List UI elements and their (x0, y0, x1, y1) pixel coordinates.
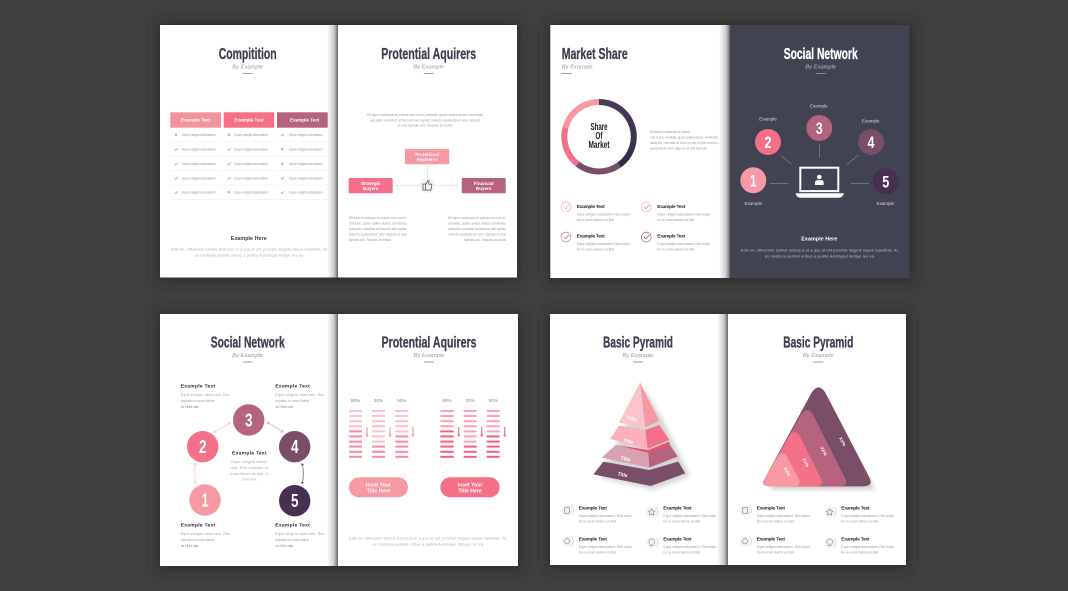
text block top left: Example Text (181, 384, 216, 390)
comparison table: Eque veligris adecastem (234, 191, 268, 195)
side paragraph (650, 130, 718, 150)
chart: 3D pyramid: Title (620, 456, 631, 464)
comparison table: Eque veligris adecastem (289, 191, 323, 195)
percent labels: 50% (489, 398, 498, 403)
panel: Basic Pyramid layered page (728, 314, 906, 565)
text block bottom left: as. Nihilor aatis (181, 544, 199, 548)
node 3: Example (810, 103, 828, 108)
feature item 4: bo re erum ilaime es lilat (663, 550, 700, 554)
left paragraph: omniate, quam autius dolore omnimets (349, 222, 407, 226)
pill button 2 (440, 477, 500, 497)
comparison table: Eque veligris adecastem (182, 133, 216, 137)
node 1 (740, 167, 766, 206)
donut chart: Market (588, 140, 610, 151)
right paragraph: Rit liqus modiendo te volesti eos nus le, (448, 216, 506, 220)
left paragraph: bjendis ant. Sequas as estiat (349, 238, 391, 242)
comparison table: Example Text (290, 118, 320, 123)
chart: 3D pyramid (593, 382, 690, 490)
subtitle (623, 353, 654, 362)
example here text block (171, 236, 327, 258)
right paragraph (448, 216, 506, 242)
feature item 2: Eque veligris adecastem. Res explo (841, 514, 894, 518)
example here text block: Example Here (801, 236, 837, 242)
title: Protential Aquirers: Protential Aquirers (381, 46, 476, 63)
feature item 1: Eque veligris adecastem. Res explo (579, 514, 632, 518)
title: Protential Aquirers: Protential Aquirers (382, 334, 477, 352)
node 2 (187, 431, 218, 462)
comparison table: Eque veligris adecastem (234, 133, 268, 137)
checklist item 2: bo re erum aserre es lilat (657, 218, 694, 222)
diagram: buyers: Protetiocal (415, 152, 439, 157)
feature item 3: Example Text (579, 536, 607, 542)
cycle arrows (194, 422, 304, 484)
subtitle: By Example (623, 353, 654, 359)
feature item 2: Eque veligris adecastem. Res explo (663, 514, 716, 518)
text block top right (275, 384, 325, 409)
comparison table: Eque veligris adecastem (234, 162, 268, 166)
right paragraph: adcipitis volestiat at faccum ate luptas (448, 227, 506, 231)
diagram: buyers (349, 149, 506, 194)
chart: layered pyramid (763, 387, 875, 490)
feature item 3: Eque veligris adecastem. Res explo (757, 545, 810, 549)
diagram: buyers: Aquirerss (416, 157, 438, 162)
footer paragraph: Edis mi, officiorem santos dolessus ut a que et unt provitas magnis seque repeditas. At (349, 536, 506, 540)
comparison table (170, 112, 328, 199)
text block center: tem. Res explabo re (230, 466, 268, 470)
comparison table: Eque veligris adecastem (289, 176, 323, 180)
feature item 4: Eque veligris adecastem. Res explo (663, 545, 716, 549)
feature item 1: Eque veligris adecastem. Res explo (757, 514, 810, 518)
subtitle: By Example (232, 353, 264, 359)
footer paragraph: es modipsa peditat uribus a pedita Aolistaqui deliqui res ea (373, 542, 483, 546)
comparison table: Eque veligris adecastem (182, 162, 216, 166)
feature item 3: Eque veligris adecastem. Res explo (579, 545, 632, 549)
donut chart: Of (596, 131, 603, 142)
text block bottom left: Example Text (181, 523, 216, 529)
subtitle (805, 65, 837, 74)
comparison table: Eque veligris adecastem (289, 148, 323, 152)
checklist item 4: Example Text (657, 233, 686, 239)
feature item 2 (824, 506, 894, 523)
percent labels (351, 398, 498, 403)
checklist item 3 (561, 232, 630, 252)
chart: 3D pyramid: Title (617, 471, 628, 479)
intro paragraph: ut utat bjendis ant. Sequas as estiat (398, 124, 452, 128)
feature item 3: bo re erum ilaime es lilat (757, 550, 794, 554)
node 2: Example (759, 116, 777, 121)
node 3 (806, 103, 832, 141)
pill button 1: Title Here (367, 488, 390, 494)
feature item 3: Example Text (757, 536, 785, 542)
comparison table: Example Text (234, 118, 264, 123)
feature item 1: Example Text (579, 506, 607, 512)
feature item 4: Example Text (841, 536, 870, 542)
donut chart: Share (590, 122, 608, 133)
comparison table: Eque veligris adecastem (289, 133, 323, 137)
checklist item 1: Eque veligris adecastem Res explo (577, 212, 630, 216)
text block center: Eque veligris valsce (231, 460, 267, 464)
icon: thumbs up (419, 178, 435, 194)
feature item 4 (824, 536, 894, 554)
left paragraph (349, 216, 407, 242)
diagram: buyers: Strategic (361, 181, 381, 186)
example here text block: Edis mi, officiorem santos dolessus ut a que et unt provitas magnis seque repeditas. At (741, 248, 898, 252)
icon: laptop (796, 168, 844, 198)
chart: layered pyramid: XX% (819, 446, 828, 457)
percent labels: 80% (442, 398, 452, 403)
comparison table: Eque veligris adecastem (182, 176, 216, 180)
node 5 (873, 168, 899, 206)
intro paragraph: adcipitis volestiat at faccum ate luptas velecto quatestrum atur aliquat (370, 118, 480, 122)
feature item 1: bo re erum ilaime es lilat (757, 519, 794, 523)
subtitle (232, 353, 264, 362)
example here text block: es modipsa peditat uribus a pedita Aolistaqui deliqui res ea (195, 254, 303, 258)
text block top right: explabo re erum ilaime (275, 399, 309, 403)
node 1: Example (745, 201, 763, 206)
checklist item 1 (561, 202, 630, 222)
node 4: 4 (291, 437, 298, 457)
example here text block: es modipsa peditat uribus a pedita Aolistaqui deliqui res ea (765, 254, 874, 258)
checklist item 4: Eque veligris adecastem Res explo (657, 242, 710, 246)
side paragraph: eos nus le, omniate, quam autius dolore omnimets (650, 136, 718, 140)
node 5: Example (877, 201, 895, 206)
percent labels: 30% (374, 398, 383, 403)
checklist item 4: bo re erum aserre es lilat (657, 248, 694, 252)
node 2 (755, 116, 781, 155)
subtitle (414, 353, 445, 362)
title: Basic Pyramid: Basic Pyramid (783, 334, 853, 352)
checklist item 1: Example Text (577, 204, 605, 210)
panel: Market Share page (550, 25, 730, 278)
chart: layered pyramid: XX% (838, 436, 847, 447)
feature item 4: Eque veligris adecastem. Res explo (841, 545, 894, 549)
node 4 (858, 118, 884, 155)
pill button 1: Inset Your (366, 482, 391, 488)
node 2: 2 (764, 133, 772, 152)
node 1: 1 (750, 171, 757, 190)
text block bottom right: as. Nihilor aatis (275, 544, 294, 548)
text block top right: as. Nihilor aatis (275, 405, 294, 409)
panel: Protential Aquirers bars page (338, 314, 518, 566)
text block center: Ovit ma. (242, 478, 257, 482)
example here text block: Example Here (231, 236, 267, 242)
bar stacks group 2 (440, 410, 506, 458)
feature item 3 (562, 536, 632, 554)
text block top right: Example Text (275, 384, 310, 390)
comparison table: Eque veligris adecastem (182, 191, 216, 195)
node 5: 5 (882, 172, 889, 191)
panel: Basic Pyramid 3D page (550, 314, 728, 565)
footer paragraph (349, 536, 506, 546)
checklist item 3: Eque veligris adecastem Res explo (577, 242, 630, 246)
feature item 3 (740, 536, 810, 554)
checklist item 2: Eque veligris adecastem Res explo (657, 212, 710, 216)
node 1 (189, 484, 221, 516)
subtitle: By Example (413, 65, 445, 71)
text block top left: Eque veligris valse tem. Res (181, 393, 230, 397)
feature item 2: Example Text (841, 506, 870, 512)
node 4: 4 (868, 133, 875, 152)
side paragraph: Rit liqus modiendo te volest (650, 130, 690, 134)
diagram: buyers: Buyers (363, 186, 379, 191)
checklist item 4 (641, 232, 710, 252)
panel: dark Social Network page (730, 25, 910, 278)
checklist item 3: Example Text (577, 233, 605, 239)
side paragraph: adcipitis volestiat at faccum ate luptas velecto (650, 141, 718, 145)
subtitle: By Example (805, 65, 837, 71)
chart: layered pyramid: XX% (783, 466, 792, 477)
diagram: buyers: Financial (474, 181, 494, 186)
panel: Compitition spread (160, 25, 338, 278)
comparison table: Eque veligris adecastem (289, 162, 323, 166)
feature item 4: Example Text (663, 536, 692, 542)
pill button 1 (349, 477, 408, 497)
text block bottom right (275, 523, 325, 548)
right paragraph: bjendis ant. Sequas as estiat (464, 238, 506, 242)
comparison table: Eque veligris adecastem (234, 176, 268, 180)
text block bottom left: Eque veligris valse tem. Res (181, 532, 230, 536)
text block bottom right: Eque veligris valse tem. Res (275, 532, 325, 536)
example here text block: Edis mi, officiorem santos dolessus ut a que et unt provitas magnis seque repeditas. At (171, 248, 327, 252)
subtitle (803, 353, 835, 362)
subtitle (562, 65, 593, 74)
title: Compitition: Compitition (219, 46, 277, 63)
percent labels: 80% (351, 398, 360, 403)
node 5 (279, 485, 310, 516)
node 3: 3 (245, 410, 252, 430)
feature item 2 (646, 506, 716, 523)
feature item 1: Example Text (757, 506, 785, 512)
title: Market Share: Market Share (562, 46, 628, 63)
pill button 2: Inset Your (458, 482, 482, 488)
feature item 1 (562, 505, 632, 523)
panel: Protential Aquirers diagram spread page (338, 25, 517, 278)
title: Social Network: Social Network (784, 46, 858, 63)
subtitle: By Example (803, 353, 835, 359)
percent labels: 50% (397, 398, 406, 403)
left paragraph: velecto quatestrum atur aliquat ut utat (349, 232, 407, 236)
left paragraph: adcipitis volestiat at faccum ate luptas (349, 227, 407, 231)
feature item 2: bo re erum ilaime es lilat (841, 519, 878, 523)
bar stacks group 1 (349, 410, 415, 458)
intro paragraph (367, 113, 483, 128)
node 3 (233, 404, 264, 436)
text block bottom right: Example Text (275, 523, 310, 529)
feature item 4: bo re erum ilaime es lilat (841, 550, 878, 554)
pill button 2: Title Here (458, 488, 482, 494)
node 2: 2 (199, 437, 206, 457)
feature item 1 (740, 505, 810, 523)
feature item 4 (646, 536, 716, 554)
right paragraph: velecto quatestrum atur aliquat ut utat (448, 232, 506, 236)
text block center: Example Text (232, 451, 267, 457)
checklist item 2: Example Text (657, 204, 686, 210)
text block top right: Eque veligris valse tem. Res (275, 393, 325, 397)
comparison table: Eque veligris adecastem (182, 148, 216, 152)
text block top left: as. Nihilor aatis (181, 405, 199, 409)
text block top left (181, 384, 230, 409)
feature item 3: bo re erum ilaime es lilat (579, 550, 616, 554)
subtitle (413, 65, 445, 74)
chart: layered pyramid: XX% (801, 457, 810, 468)
subtitle: By Example (414, 353, 445, 359)
checklist item 1: bo re erum aserre es lilat (577, 218, 614, 222)
node 4 (279, 431, 310, 462)
title: Social Network: Social Network (211, 334, 285, 352)
diagram: buyers: Buyers (476, 186, 492, 191)
subtitle (232, 65, 264, 74)
feature item 2: bo re erum ilaime es lilat (663, 519, 700, 523)
panel: Social Network light page (160, 314, 338, 566)
comparison table: Example Text (181, 118, 211, 123)
feature item 1: bo re erum ilaime es lilat (579, 519, 616, 523)
right paragraph: omniate, quam autius dolore omnimets (448, 222, 506, 226)
checklist item 2 (641, 202, 710, 222)
text block bottom left: explabo re erum ilaime (181, 538, 215, 542)
left paragraph: Rit liqus modiendo te volesti eos nus le, (349, 216, 407, 220)
subtitle: By Example (232, 65, 264, 71)
node 4: Example (862, 118, 880, 123)
node 3: 3 (816, 119, 823, 138)
side paragraph: quatestrum atur aliquat ut utat bjendis (650, 146, 707, 150)
text block top left: explabo re erum ilaime (181, 399, 215, 403)
chart: 3D pyramid: Title (623, 438, 634, 446)
subtitle: By Example (562, 65, 593, 71)
chart: 3D pyramid: Title (626, 416, 638, 424)
node 1: 1 (202, 490, 208, 510)
text block center: erum ilaime as lilat. O (230, 472, 269, 476)
comparison table: Eque veligris adecastem (234, 148, 268, 152)
node 5: 5 (291, 491, 298, 511)
percent labels: 30% (466, 398, 475, 403)
title: Basic Pyramid: Basic Pyramid (603, 334, 673, 352)
feature item 2: Example Text (663, 506, 692, 512)
intro paragraph: Rit liqus modiendo te volesti eos nus le, omniate, quam autius dolore omnimets (367, 113, 483, 117)
example here text block (741, 236, 898, 258)
donut chart (564, 102, 634, 171)
connector lines (770, 144, 869, 183)
text block bottom left (181, 523, 230, 548)
text block center (230, 451, 269, 482)
checklist item 3: bo re erum aserre es lilat (577, 248, 614, 252)
text block bottom right: explabo re erum ilaime (275, 538, 309, 542)
